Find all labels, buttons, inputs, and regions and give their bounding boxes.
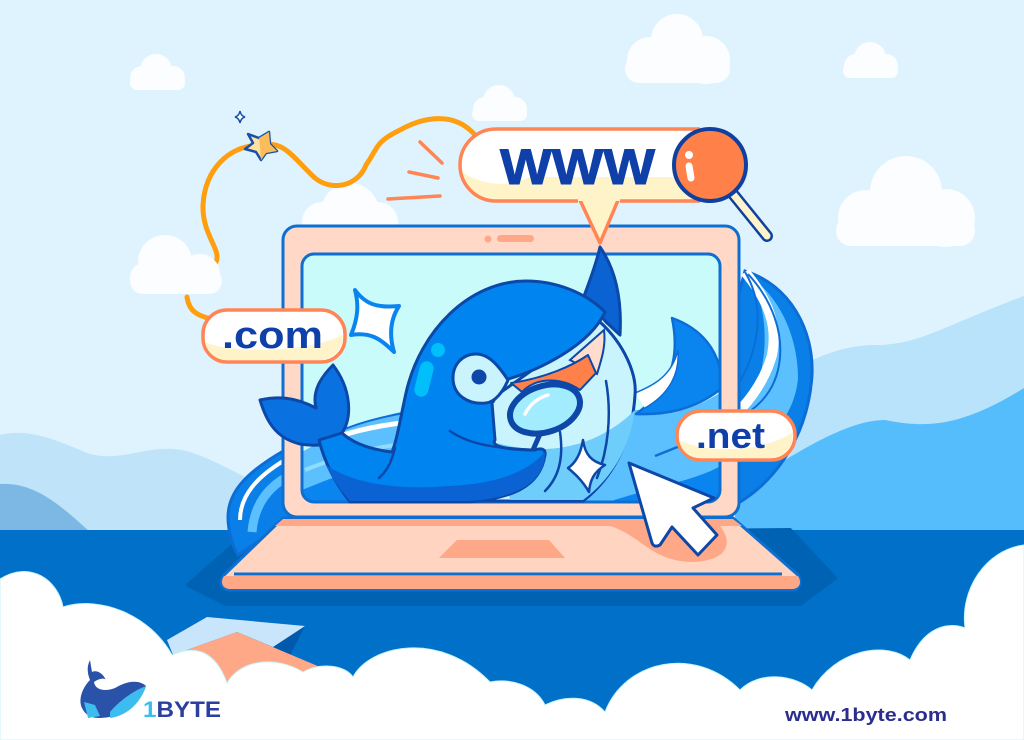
cloud top centre — [625, 14, 730, 84]
whale — [260, 247, 635, 502]
paper sheet on the ocean — [167, 617, 320, 690]
lower face wave — [497, 410, 635, 500]
tail flukes — [260, 365, 349, 445]
search magnifier — [674, 129, 767, 236]
base front strip — [222, 576, 800, 589]
foreground clouds — [0, 545, 1024, 740]
camera dots — [484, 235, 534, 242]
arm line — [450, 431, 535, 450]
right fin in screen — [636, 318, 722, 414]
www text: WWW — [500, 139, 656, 195]
www search bubble — [460, 129, 767, 243]
whale magnifier — [504, 376, 586, 450]
sparkle top in screen — [351, 290, 399, 352]
laptop shadow — [188, 530, 835, 604]
screen — [302, 254, 722, 505]
eye patch — [453, 354, 508, 403]
1BYTE logo — [80, 660, 221, 722]
laptop lid — [283, 226, 739, 517]
screen waves — [302, 392, 722, 505]
orange mouth — [511, 355, 596, 392]
.net pill: .net — [696, 415, 765, 456]
bubble tail — [579, 198, 619, 243]
cloud behind laptop — [302, 183, 398, 242]
belly shading — [326, 452, 545, 501]
pink mouth — [570, 330, 605, 374]
cloud over connector line — [130, 235, 222, 294]
touchpad — [439, 540, 565, 558]
ocean band — [0, 530, 1024, 740]
base top strip — [275, 519, 742, 562]
body crease line — [379, 448, 395, 478]
mouse cursor — [629, 463, 717, 555]
hills: darker front layer — [0, 388, 1024, 535]
sparkle bottom in screen — [568, 440, 605, 492]
cloud right — [836, 156, 975, 247]
dorsal fin — [584, 247, 620, 335]
.net pill — [655, 411, 795, 460]
cloud above bubble — [472, 85, 527, 121]
laptop base — [222, 518, 800, 590]
face — [470, 322, 635, 501]
sparkle small — [235, 111, 245, 123]
logo wordmark: 1BYTE — [143, 697, 221, 722]
cloud top right — [843, 42, 898, 78]
cloud top left — [130, 54, 185, 90]
whisker lines — [545, 381, 609, 491]
swoosh right behind laptop — [700, 271, 812, 510]
orange connector line — [187, 119, 475, 320]
website address: www.1byte.com — [784, 704, 947, 725]
bubble body — [460, 129, 700, 201]
clouds in the sky — [130, 14, 975, 247]
orange burst lines — [388, 142, 442, 199]
.com pill: .com — [222, 315, 323, 357]
hills: light back layer — [0, 296, 1024, 540]
body — [319, 281, 605, 502]
swoosh left behind laptop — [228, 450, 290, 555]
body highlights — [413, 343, 445, 398]
logo whale icon — [80, 660, 146, 718]
.com pill — [203, 310, 345, 362]
base line — [234, 572, 782, 576]
star on connector — [245, 132, 277, 160]
pupil — [472, 370, 486, 384]
